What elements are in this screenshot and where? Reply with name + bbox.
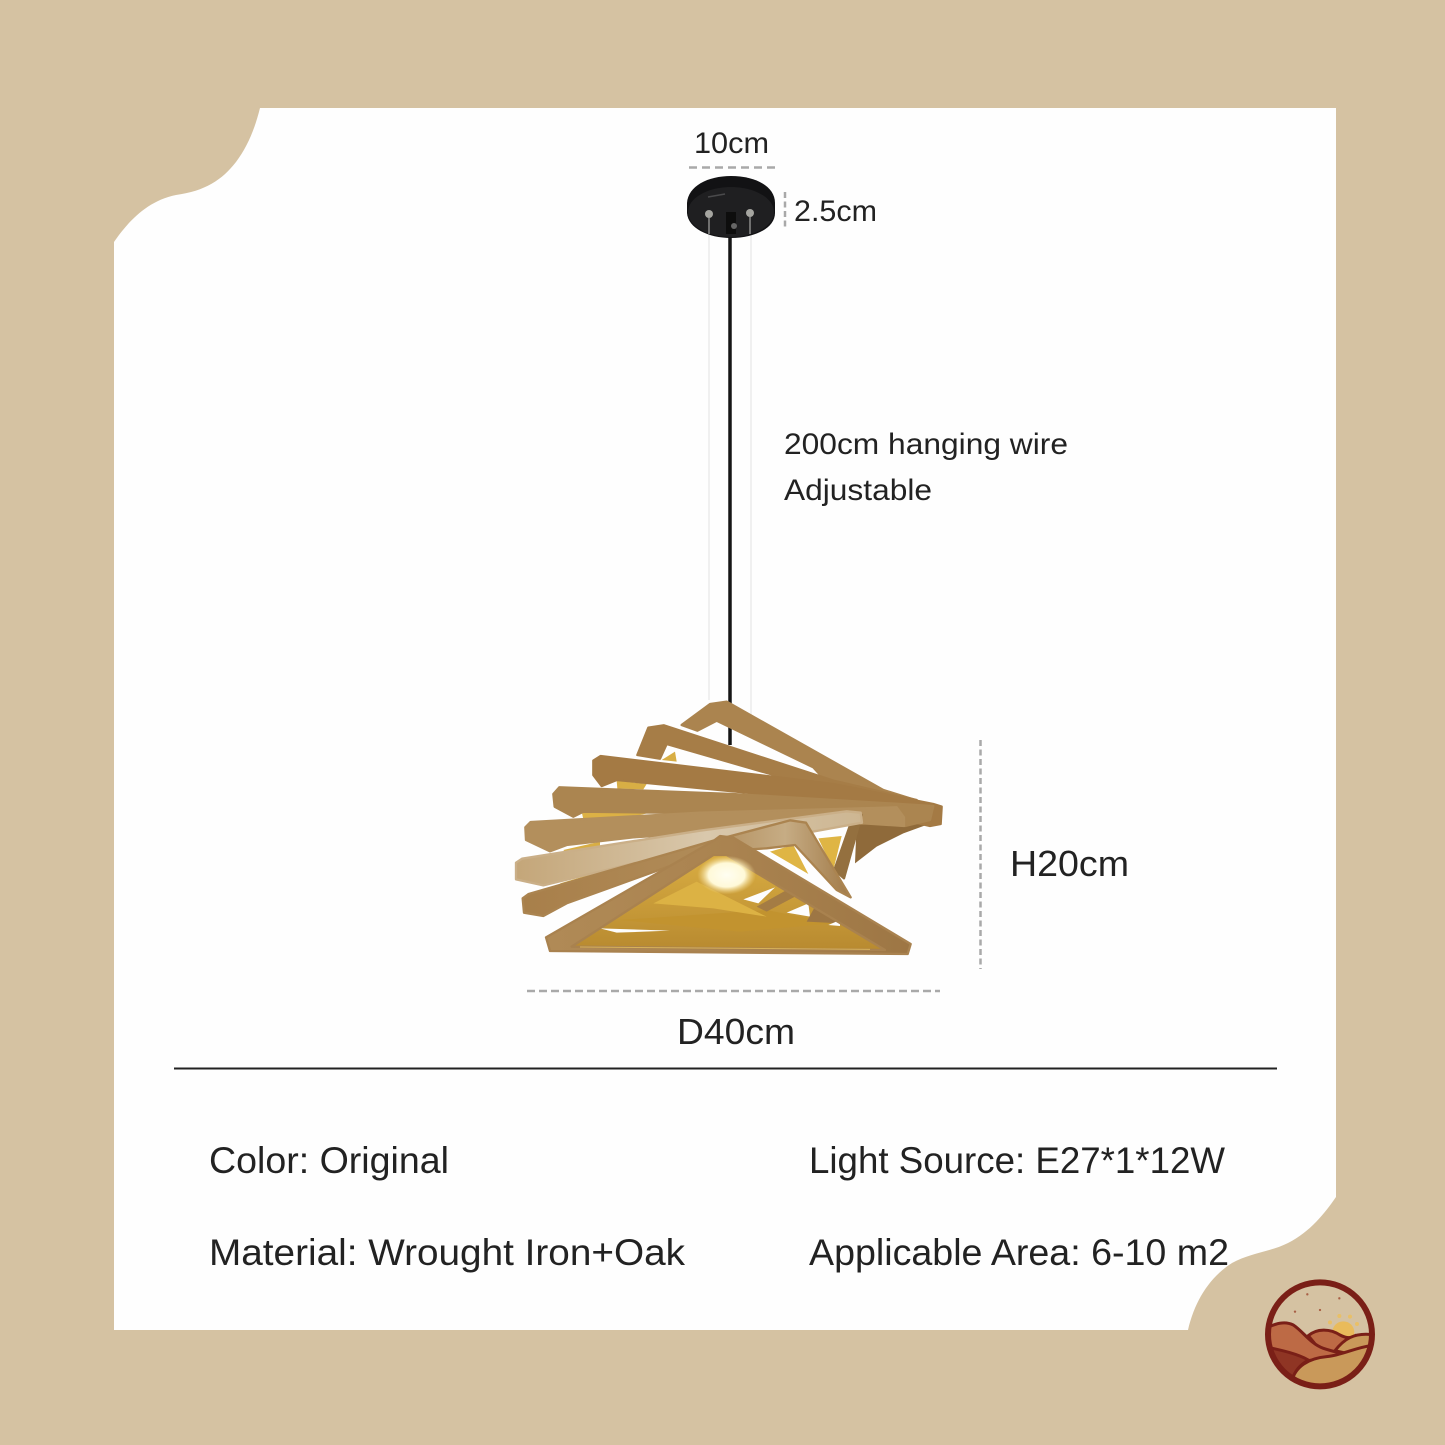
label: hanging wire length: Adjustable <box>784 474 932 507</box>
label: lamp height: H20cm <box>1010 843 1129 884</box>
wooden lamp shade <box>516 702 942 954</box>
spec: color: Color: Original <box>209 1140 449 1181</box>
white panel <box>114 108 1336 1330</box>
label: lamp diameter: D40cm <box>677 1011 795 1052</box>
label: canopy width: 10cm <box>694 127 769 160</box>
hanging wires <box>709 232 751 745</box>
label: canopy width <box>689 127 776 168</box>
label: canopy height: 2.5cm <box>794 195 877 228</box>
label: hanging wire length: 200cm hanging wire <box>784 428 1068 461</box>
spec: applicable area: Applicable Area: 6-10 m2 <box>809 1232 1229 1273</box>
ceiling canopy <box>687 176 775 238</box>
spec: light source: Light Source: E27*1*12W <box>809 1140 1225 1181</box>
label: hanging wire length <box>784 428 1068 507</box>
spec: material: Material: Wrought Iron+Oak <box>209 1232 686 1273</box>
logo: desert dunes and sun <box>1265 1282 1375 1397</box>
